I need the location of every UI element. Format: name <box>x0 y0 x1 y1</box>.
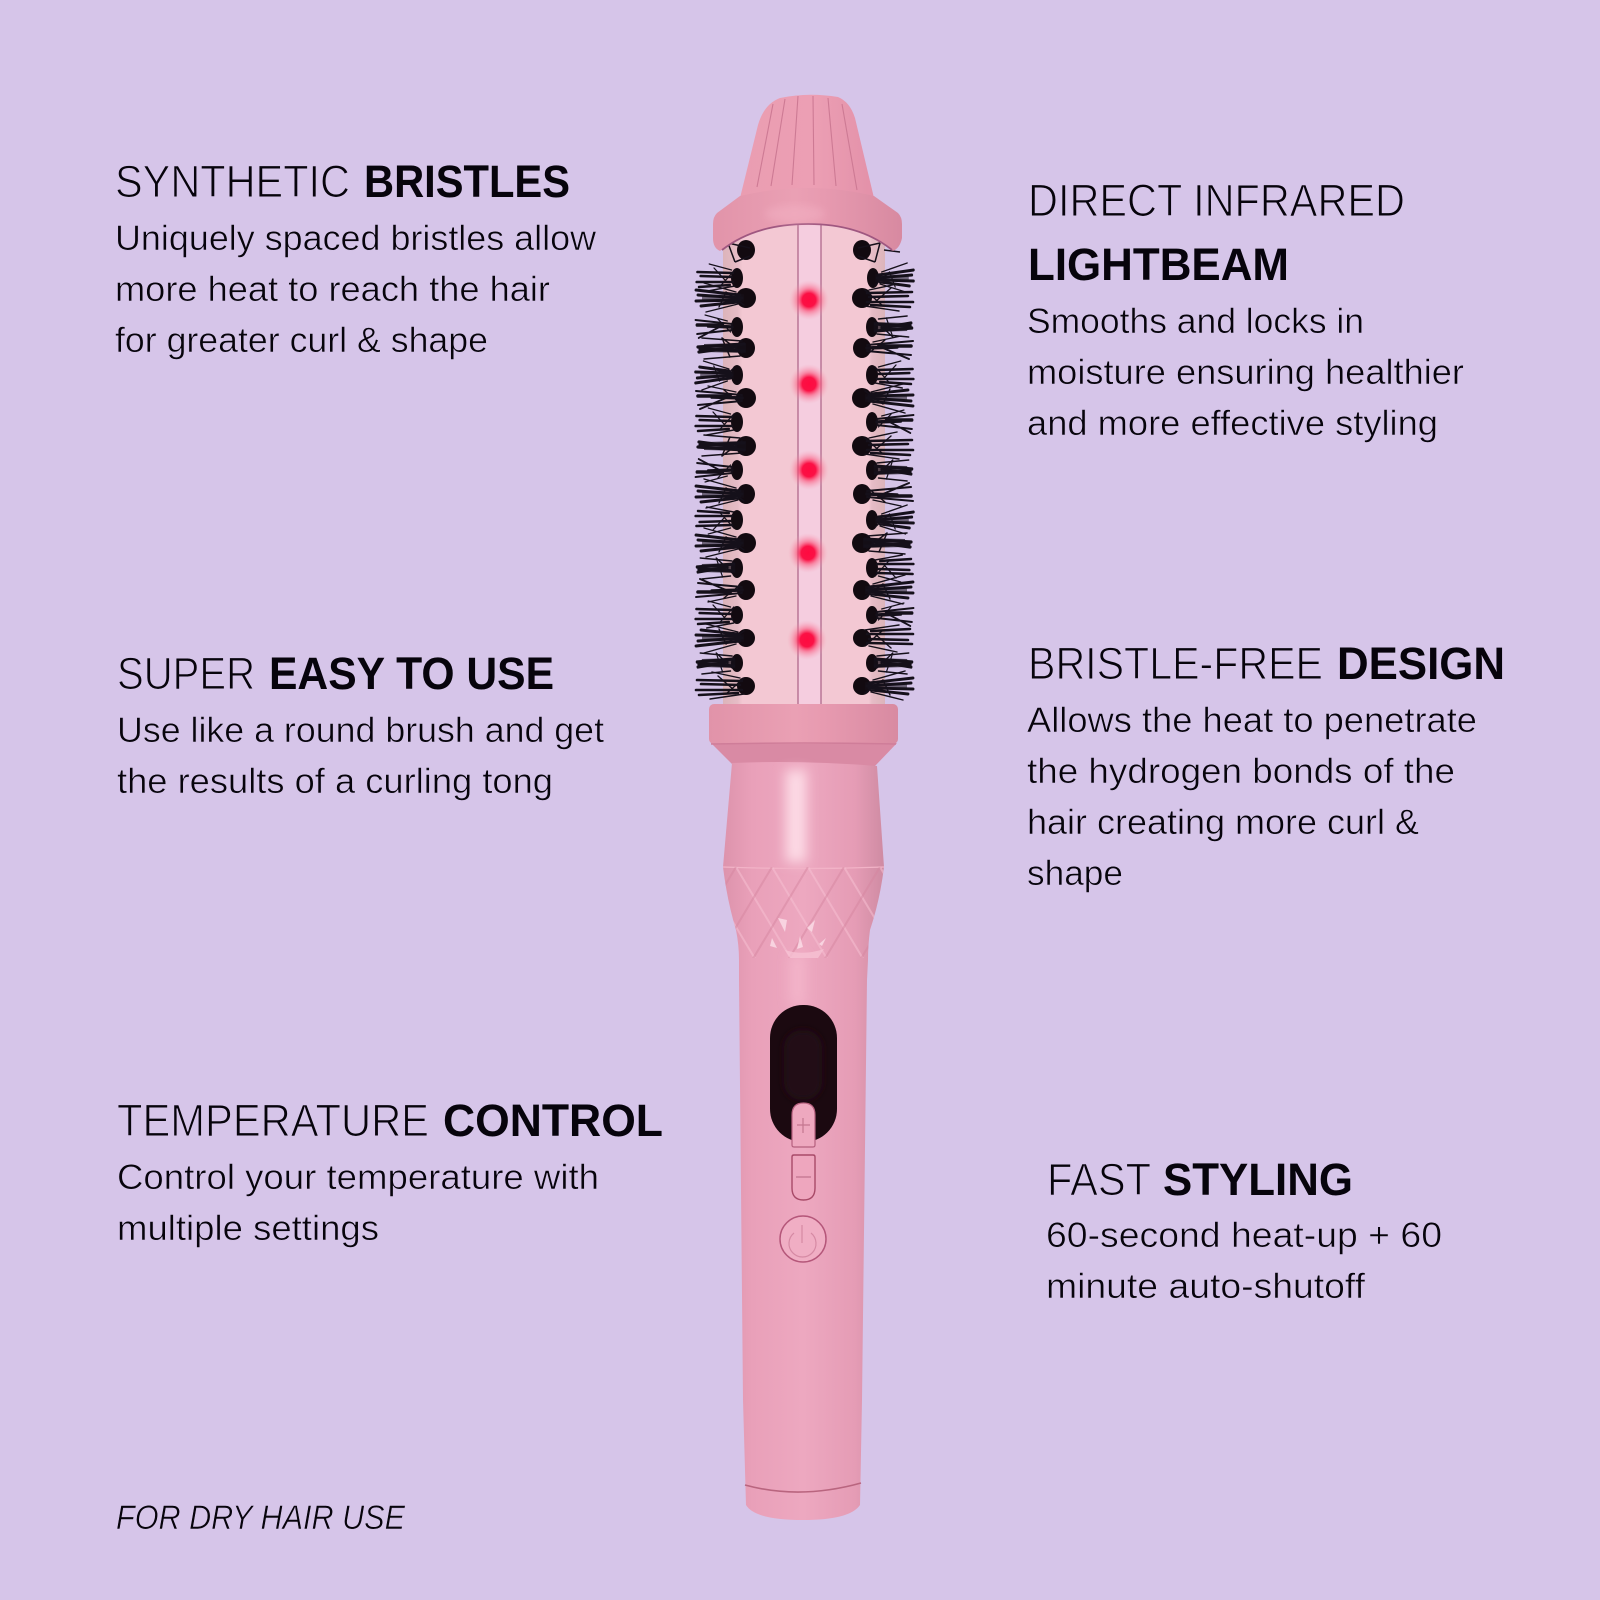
upper collar <box>713 188 902 251</box>
infrared light strip <box>798 222 821 708</box>
text: fast styling description: 60-second heat-up + 60 <box>1046 1216 1442 1255</box>
text: lightbeam description <box>1027 302 1464 443</box>
text: lightbeam description: moisture ensuring healthier <box>1027 353 1464 392</box>
heading: fast styling: STYLING <box>1163 1154 1353 1205</box>
brush barrel <box>723 220 885 710</box>
text: bristle-free description: Allows the heat to penetrate <box>1027 701 1477 740</box>
panel: super easy to use <box>117 648 604 801</box>
panel: bristle-free design <box>1027 638 1505 893</box>
infrared light dots <box>787 280 829 660</box>
text: bristle-free description: hair creating more curl & <box>1027 803 1419 842</box>
heading: synthetic bristles: SYNTHETIC <box>115 156 350 207</box>
text: temperature description <box>117 1158 599 1248</box>
heading: super easy to use: EASY TO USE <box>269 648 554 699</box>
text: temperature description: Control your temperature with <box>117 1158 599 1197</box>
heading: synthetic bristles: BRISTLES <box>364 156 570 207</box>
heading: temperature control: CONTROL <box>443 1095 663 1146</box>
heading: fast styling: FAST <box>1047 1154 1151 1205</box>
text: synthetic bristles description <box>115 219 597 360</box>
text: bristle-free description: shape <box>1027 854 1123 893</box>
display window <box>770 1005 837 1142</box>
heading: direct infrared lightbeam: DIRECT INFRARED <box>1028 175 1405 226</box>
heading: synthetic bristles <box>115 156 570 207</box>
diamond texture grip <box>726 867 884 958</box>
text: bristle-free description <box>1027 701 1477 893</box>
panel: temperature control <box>117 1095 663 1248</box>
panel: fast styling <box>1046 1154 1442 1306</box>
heading: fast styling <box>1047 1154 1353 1205</box>
panel: synthetic bristles <box>115 156 597 360</box>
text: synthetic bristles description: more heat to reach the hair <box>115 270 550 309</box>
heading: super easy to use: SUPER <box>117 648 255 699</box>
text: easy to use description <box>117 711 604 801</box>
heading: temperature control <box>117 1095 663 1146</box>
button: plus <box>792 1103 815 1147</box>
right bristle holes <box>852 240 879 695</box>
right bristles <box>858 243 914 700</box>
heading: super easy to use <box>117 648 554 699</box>
heading: bristle-free design <box>1028 638 1505 689</box>
text: easy to use description: Use like a round brush and get <box>117 711 604 750</box>
note: for dry hair use: FOR DRY HAIR USE <box>116 1499 405 1537</box>
lower collar <box>709 704 898 766</box>
text: lightbeam description: and more effective styling <box>1027 404 1438 443</box>
text: bristle-free description: the hydrogen bonds of the <box>1027 752 1455 791</box>
text: synthetic bristles description: Uniquely spaced bristles allow <box>115 219 597 258</box>
text: temperature description: multiple settings <box>117 1209 379 1248</box>
product illustration: infrared brush <box>694 94 915 1520</box>
button: power <box>780 1216 826 1262</box>
handle highlight <box>723 770 884 1005</box>
text: fast styling description <box>1046 1216 1442 1306</box>
button: minus <box>792 1155 815 1200</box>
end cap cone with ribs <box>740 95 874 198</box>
text: lightbeam description: Smooths and locks in <box>1027 302 1364 341</box>
handle body <box>723 762 884 1520</box>
text: easy to use description: the results of a curling tong <box>117 762 553 801</box>
text: fast styling description: minute auto-shutoff <box>1046 1267 1365 1306</box>
heading: bristle-free design: DESIGN <box>1337 638 1505 689</box>
left bristle holes <box>731 240 756 695</box>
heading: bristle-free design: BRISTLE-FREE <box>1028 638 1323 689</box>
heading: direct infrared lightbeam <box>1028 175 1405 290</box>
heading: temperature control: TEMPERATURE <box>117 1095 429 1146</box>
text: synthetic bristles description: for greater curl & shape <box>115 321 488 360</box>
panel: direct infrared lightbeam <box>1027 175 1464 443</box>
left bristles <box>695 243 750 699</box>
heading: direct infrared lightbeam: LIGHTBEAM <box>1028 239 1289 290</box>
handle base ring <box>745 1483 861 1492</box>
